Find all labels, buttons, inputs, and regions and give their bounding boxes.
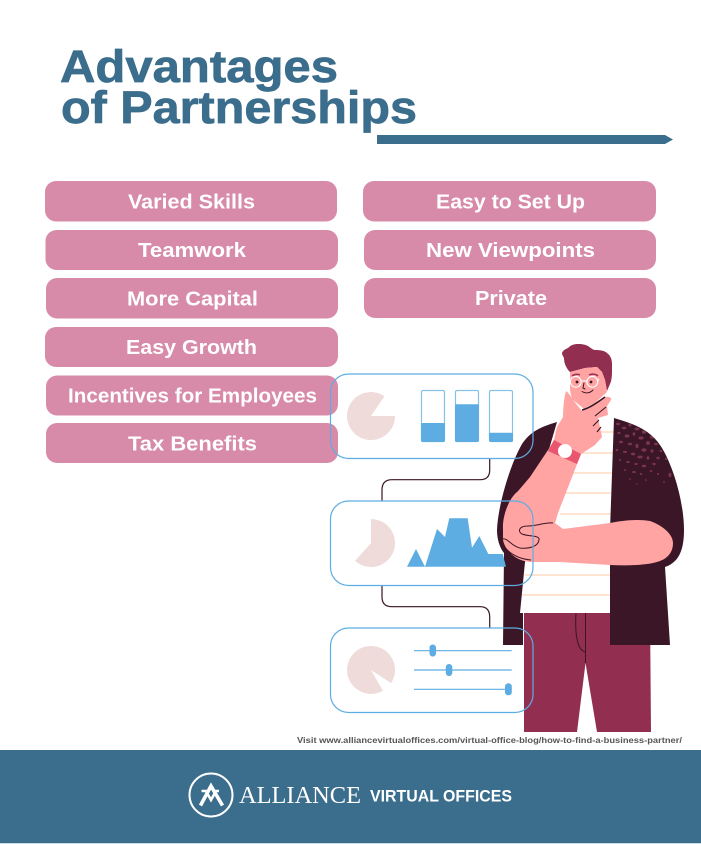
title [60, 41, 417, 133]
raised forearm and hand [503, 391, 611, 550]
pill: Incentives for Employees [46, 376, 338, 416]
pie chart 1 [347, 392, 395, 440]
pill: Tax Benefits: Tax Benefits [128, 434, 257, 456]
pill: Easy to Set Up: Easy to Set Up [436, 192, 585, 214]
title: Advantages [60, 41, 338, 92]
pill: Easy Growth [45, 327, 338, 367]
trouser pocket lines [576, 613, 586, 663]
left advantages list [45, 181, 338, 463]
pill: More Capital: More Capital [127, 288, 258, 310]
wrist watch [548, 440, 581, 464]
chin hand finger lines [582, 397, 605, 410]
title: of Partnerships [61, 82, 417, 133]
brand tagline: VIRTUAL OFFICES [370, 786, 512, 806]
panel: area chart [330, 501, 533, 586]
illustration: thinking man [497, 344, 684, 732]
pie chart 2 [355, 519, 395, 567]
slider tracks and knobs [414, 644, 512, 695]
mountain area [407, 518, 506, 567]
footer band [0, 750, 701, 844]
pill: Teamwork: Teamwork [138, 240, 247, 262]
pill: Private: Private [475, 288, 547, 310]
jacket right side [610, 418, 684, 645]
brand name: ALLIANCE [239, 783, 361, 809]
glasses [570, 376, 599, 387]
eyebrows [572, 374, 598, 376]
bars [421, 390, 513, 442]
pill: New Viewpoints [364, 230, 656, 270]
source link: Visit www.alliancevirtualoffices.com/virtual-office-blog/how-to-find-a-business-partner/ [297, 735, 683, 745]
pie chart 3 [347, 646, 395, 694]
pill: Teamwork [46, 230, 338, 270]
pill: Easy to Set Up [363, 181, 656, 222]
jacket speckle texture [616, 423, 672, 485]
pill: New Viewpoints: New Viewpoints [426, 240, 595, 262]
pill: Incentives for Employees: Incentives for Employees [68, 386, 317, 408]
right advantages list [363, 181, 656, 318]
horizontal arm [503, 490, 673, 565]
pill: More Capital [46, 278, 338, 318]
knuckle lines [593, 407, 606, 432]
pill: Varied Skills [45, 181, 337, 222]
pill: Tax Benefits [46, 423, 338, 463]
facial features [576, 381, 593, 393]
connector lines [382, 458, 490, 628]
jacket left side [497, 422, 557, 645]
pill: Varied Skills: Varied Skills [128, 192, 255, 214]
icon: Alliance logo [190, 774, 232, 816]
striped shirt [520, 416, 614, 613]
pill: Private [364, 278, 656, 318]
trousers [524, 610, 651, 732]
title underline arrow [377, 135, 673, 144]
finger lines [503, 523, 553, 560]
face [570, 367, 607, 409]
panel: bar charts [330, 374, 533, 458]
pill: Easy Growth: Easy Growth [126, 337, 257, 359]
panel: sliders [330, 628, 533, 712]
hair [562, 344, 612, 391]
collar [573, 400, 585, 412]
